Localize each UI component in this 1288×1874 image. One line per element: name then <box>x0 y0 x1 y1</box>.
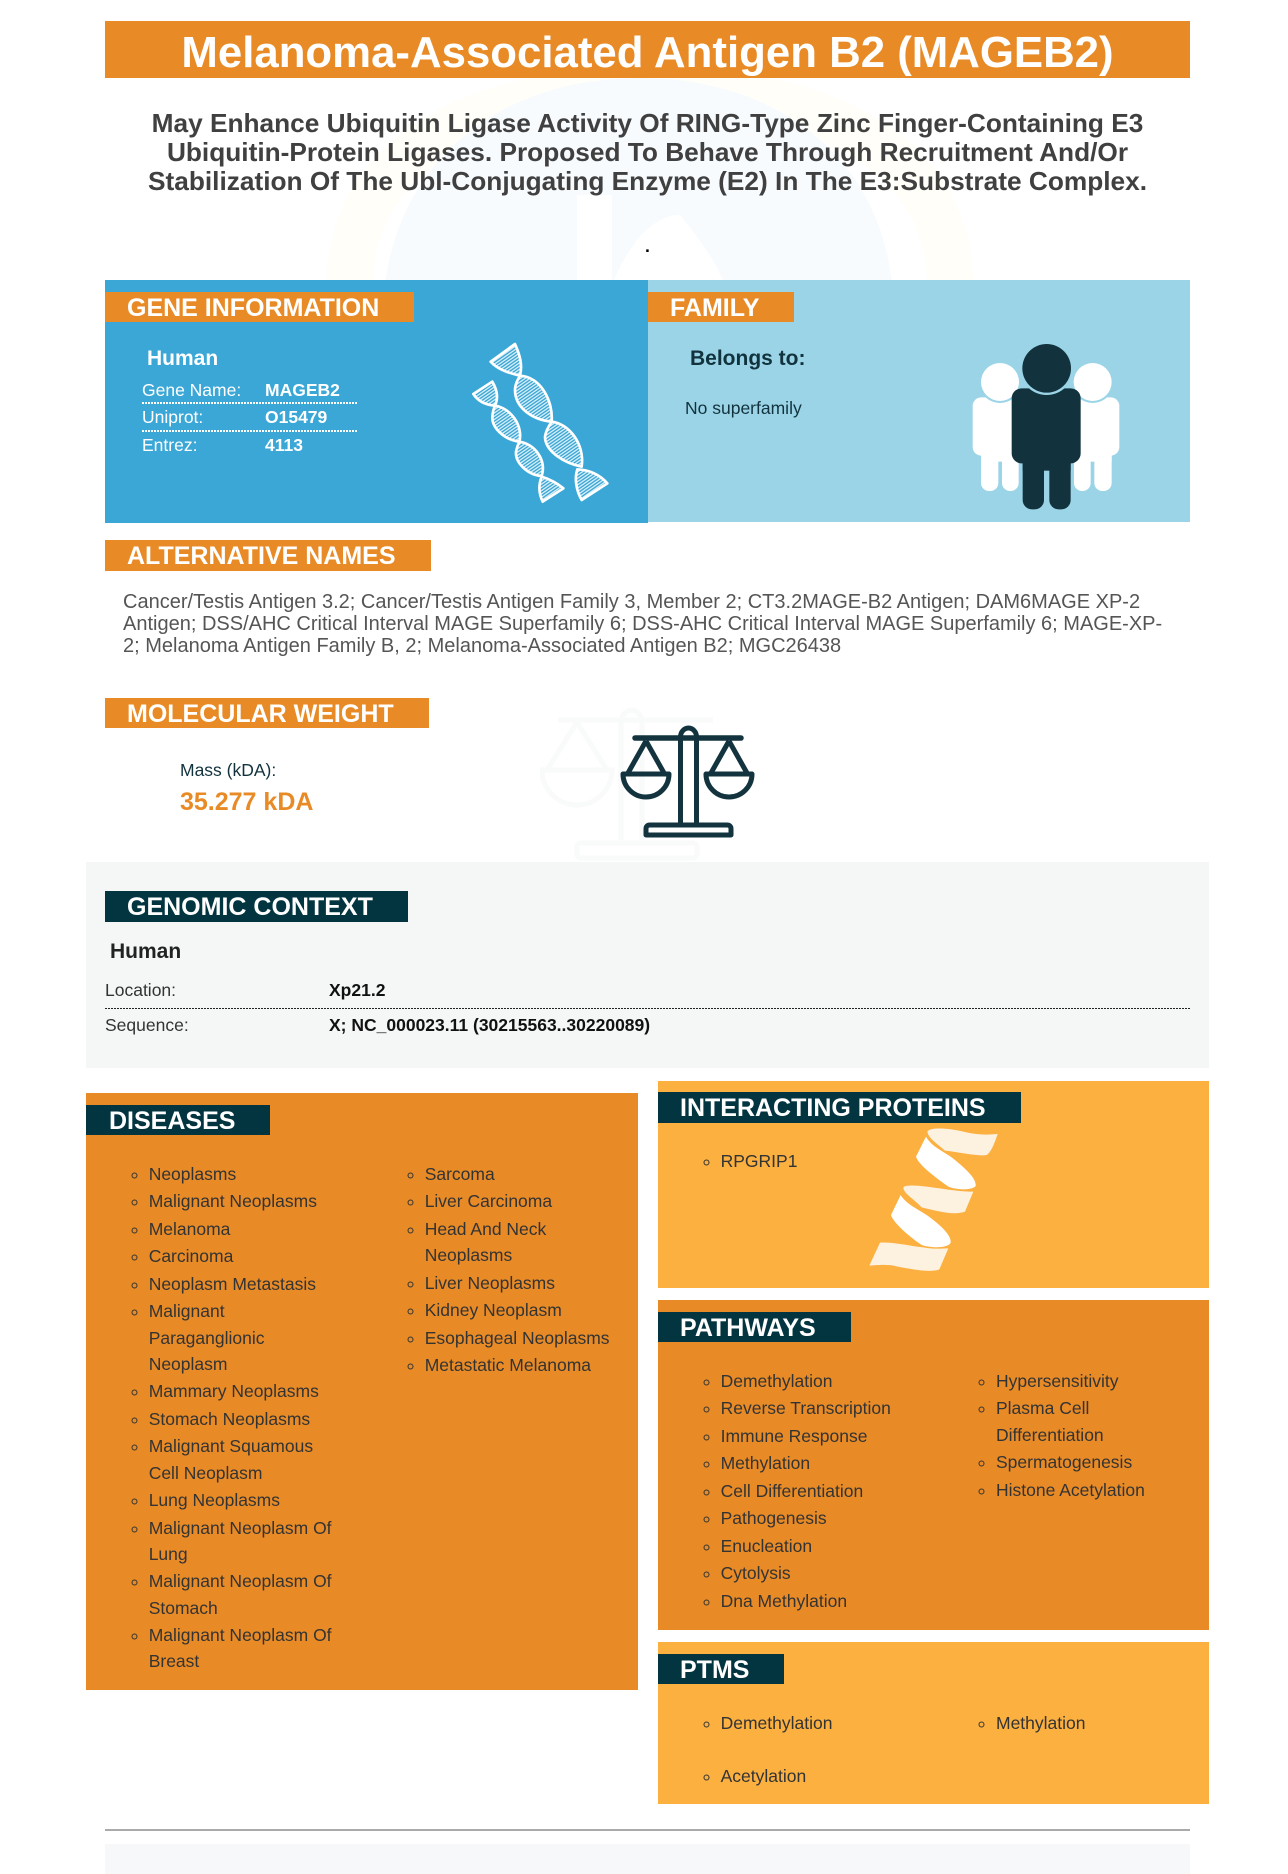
panel: interacting proteins <box>658 1081 1209 1288</box>
alternative names text: Antigen; DSS/AHC Critical Interval MAGE Superfamily 6; DSS-AHC Critical Interval MAGE Superfamily 6; MAGE-XP- <box>123 613 1162 635</box>
list: pathways column 2: Spermatogenesis <box>996 1452 1132 1472</box>
list: pathways column 1: Dna Methylation <box>721 1591 847 1611</box>
heading: alternative names: ALTERNATIVE NAMES <box>127 542 396 570</box>
list: pathways column 1 <box>704 1371 891 1611</box>
list: diseases column 1: Malignant Neoplasms <box>149 1191 317 1211</box>
panel: gene information: 4113 <box>265 435 303 455</box>
heading: genomic context: GENOMIC CONTEXT <box>127 893 373 921</box>
watermark logo <box>300 70 1000 285</box>
alternative names text: 2; Melanoma Antigen Family B, 2; Melanoma-Associated Antigen B2; MGC26438 <box>123 635 841 657</box>
panel: genomic context: X; NC_000023.11 (30215563..30220089) <box>329 1015 650 1035</box>
divider line <box>142 402 357 404</box>
divider line <box>142 430 357 432</box>
list: pathways column 1: Cell Differentiation <box>721 1481 863 1501</box>
heading: diseases <box>86 1105 270 1135</box>
panel: gene information: MAGEB2 <box>265 380 340 400</box>
list: diseases column 2: Liver Neoplasms <box>425 1273 555 1293</box>
heading: ptms: PTMS <box>680 1656 749 1684</box>
summary text <box>148 108 1147 196</box>
list: diseases column 2 <box>408 1164 610 1375</box>
panel: family <box>648 280 1190 522</box>
species label: Human <box>110 940 181 963</box>
list: diseases column 2: Sarcoma <box>425 1164 495 1184</box>
heading: diseases: DISEASES <box>109 1107 235 1135</box>
list: pathways column 2 <box>978 1371 1145 1500</box>
panel: genomic context: Xp21.2 <box>329 980 385 1000</box>
list: diseases column 1: Malignant Neoplasm Of Lung <box>149 1518 332 1564</box>
list: ptms column 2: Methylation <box>996 1712 1086 1732</box>
heading: family <box>648 292 794 322</box>
list: diseases column 1: Melanoma <box>149 1219 230 1239</box>
sequence row <box>105 1015 650 1035</box>
list: pathways column 1: Demethylation <box>721 1371 832 1391</box>
panel: genomic context <box>86 862 1209 1068</box>
panel: pathways <box>658 1300 1209 1630</box>
list: pathways column 1: Pathogenesis <box>721 1508 827 1528</box>
list: pathways column 1: Immune Response <box>721 1426 867 1446</box>
panel: diseases <box>86 1093 638 1690</box>
list: ptms column 1 <box>704 1712 832 1786</box>
list: diseases column 1: Lung Neoplasms <box>149 1490 280 1510</box>
list: diseases column 1 <box>132 1164 332 1671</box>
list: diseases column 1: Malignant Paraganglionic Neoplasm <box>149 1301 264 1374</box>
mass value: 35.277 kDA <box>180 788 313 816</box>
list: interacting proteins: RPGRIP1 <box>721 1151 797 1171</box>
list: diseases column 2: Metastatic Melanoma <box>425 1355 591 1375</box>
list: pathways column 1: Cytolysis <box>721 1563 791 1583</box>
panel: gene information: O15479 <box>265 407 327 427</box>
list: pathways column 1: Reverse Transcription <box>721 1398 891 1418</box>
belongs to label: Belongs to: <box>690 347 806 370</box>
panel: gene information <box>105 280 648 523</box>
list: diseases column 1: Stomach Neoplasms <box>149 1409 310 1429</box>
list: pathways column 2: Plasma Cell Differentiation <box>996 1398 1104 1445</box>
list: pathways column 1: Methylation <box>721 1453 810 1473</box>
location row: Location: <box>105 980 176 1000</box>
summary text: May Enhance Ubiquitin Ligase Activity Of RING-Type Zinc Finger-Containing E3 <box>152 108 1143 138</box>
panel: ptms <box>658 1642 1209 1804</box>
heading: pathways: PATHWAYS <box>680 1314 816 1342</box>
icon: protein helix <box>869 1128 998 1271</box>
list: pathways column 2: Hypersensitivity <box>996 1371 1119 1391</box>
mass label: Mass (kDA): <box>180 760 276 780</box>
species label: Human <box>147 347 218 370</box>
list: diseases column 1: Malignant Neoplasm Of Stomach <box>149 1571 332 1618</box>
entrez row: Entrez: <box>142 435 197 455</box>
list: diseases column 1: Malignant Neoplasm Of Breast <box>149 1625 332 1671</box>
list: diseases column 1: Mammary Neoplasms <box>149 1381 319 1401</box>
gene name row: Gene Name: <box>142 380 241 400</box>
heading: molecular weight: MOLECULAR WEIGHT <box>127 700 394 728</box>
gene name row <box>142 380 340 400</box>
sequence row: Sequence: <box>105 1015 189 1035</box>
list: pathways column 2: Histone Acetylation <box>996 1480 1145 1500</box>
icon: group of people <box>972 344 1120 510</box>
location row <box>105 980 385 1000</box>
list: diseases column 2: Kidney Neoplasm <box>425 1300 562 1320</box>
list: diseases column 1: Malignant Squamous Cell Neoplasm <box>149 1436 313 1483</box>
superfamily text: No superfamily <box>685 398 802 418</box>
heading: pathways <box>658 1312 851 1342</box>
entrez row <box>142 435 303 455</box>
uniprot row: Uniprot: <box>142 407 203 427</box>
footer band <box>105 1844 1190 1874</box>
heading: gene information: GENE INFORMATION <box>127 294 379 322</box>
heading: family: FAMILY <box>670 294 759 322</box>
list: diseases column 1: Neoplasms <box>149 1164 236 1184</box>
divider line <box>105 1008 1190 1009</box>
summary text: Stabilization Of The Ubl-Conjugating Enzyme (E2) In The E3:Substrate Complex. <box>148 166 1147 196</box>
heading: ptms <box>658 1654 784 1684</box>
alternative names text: Cancer/Testis Antigen 3.2; Cancer/Testis Antigen Family 3, Member 2; CT3.2MAGE-B2 Antigen; DAM6MAGE XP-2 <box>123 591 1140 613</box>
list: diseases column 2: Liver Carcinoma <box>425 1191 552 1211</box>
heading: interacting proteins: INTERACTING PROTEINS <box>680 1094 986 1122</box>
title banner: Melanoma-Associated Antigen B2 (MAGEB2) <box>181 28 1114 77</box>
list: diseases column 2: Esophageal Neoplasms <box>425 1328 610 1348</box>
icon: balance scale <box>620 726 754 838</box>
list: pathways column 1: Enucleation <box>721 1536 812 1556</box>
list: ptms column 1: Acetylation <box>721 1766 806 1786</box>
list: diseases column 2: Head And Neck Neoplasms <box>425 1219 546 1265</box>
summary text: Ubiquitin-Protein Ligases. Proposed To Behave Through Recruitment And/Or <box>167 137 1128 167</box>
list: diseases column 1: Neoplasm Metastasis <box>149 1274 316 1294</box>
list: ptms column 1: Demethylation <box>721 1712 832 1732</box>
uniprot row <box>142 407 327 427</box>
alternative names text <box>123 591 1162 657</box>
small dot: . <box>645 236 650 256</box>
list: diseases column 1: Carcinoma <box>149 1246 233 1266</box>
icon: balance scale watermark <box>540 700 780 862</box>
icon: dna helices <box>472 342 609 504</box>
